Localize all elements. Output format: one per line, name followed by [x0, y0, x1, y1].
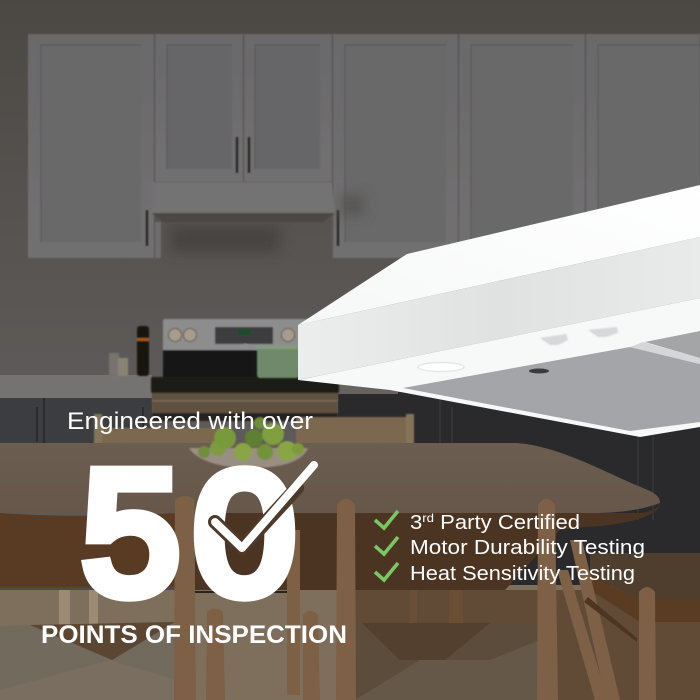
big number 50: 5	[82, 436, 180, 631]
item: 3rd party certified: rd	[422, 511, 434, 525]
hood top surface	[298, 185, 700, 325]
second grease filter	[645, 331, 700, 358]
check mark over the zero	[215, 465, 314, 548]
check icon 2	[375, 537, 398, 554]
bottle and cans on counter	[109, 326, 149, 376]
hood front face	[298, 237, 700, 380]
control switches	[540, 327, 618, 345]
base counter, left	[0, 375, 152, 398]
shadow under small hood	[170, 226, 280, 252]
small range hood in the scene	[152, 182, 335, 258]
item: 3rd party certified: 3	[410, 512, 421, 534]
stove	[151, 319, 339, 421]
woven chair seats	[0, 622, 540, 700]
green pot	[244, 344, 299, 378]
chair posts and frames	[174, 496, 656, 700]
upper cabinets	[28, 34, 700, 258]
hood underside panel	[298, 298, 700, 437]
right counter	[338, 378, 398, 394]
table legs	[59, 590, 463, 635]
lower cabinets, left	[0, 398, 152, 446]
left chair back	[0, 513, 178, 587]
check icon 1	[375, 511, 398, 528]
lower cabinets, right	[338, 392, 700, 592]
text: engineered with over: Engineered with over	[67, 408, 313, 435]
item: heat sensitivity testing: Heat Sensitivity Testing	[410, 563, 635, 585]
dining chair back, behind the table	[94, 414, 414, 446]
dining floor	[0, 585, 700, 700]
dining table	[0, 443, 660, 593]
filter latch	[529, 368, 549, 374]
check icon 3	[375, 563, 398, 580]
big number 50: 0	[194, 436, 295, 630]
big number 50	[82, 436, 295, 631]
right chair seat	[590, 553, 700, 600]
large white range hood product	[298, 185, 700, 437]
LED light	[418, 362, 464, 372]
main grease filter	[403, 347, 700, 431]
item: 3rd party certified: Party Certified	[434, 512, 580, 534]
checklist	[375, 511, 645, 585]
right chair seat apron	[590, 575, 700, 622]
filter divider	[630, 342, 700, 364]
bowl of green pears	[189, 417, 308, 468]
text: points of inspection: POINTS OF INSPECTION	[41, 621, 347, 649]
item: motor durability testing: Motor Durability Testing	[410, 537, 645, 559]
